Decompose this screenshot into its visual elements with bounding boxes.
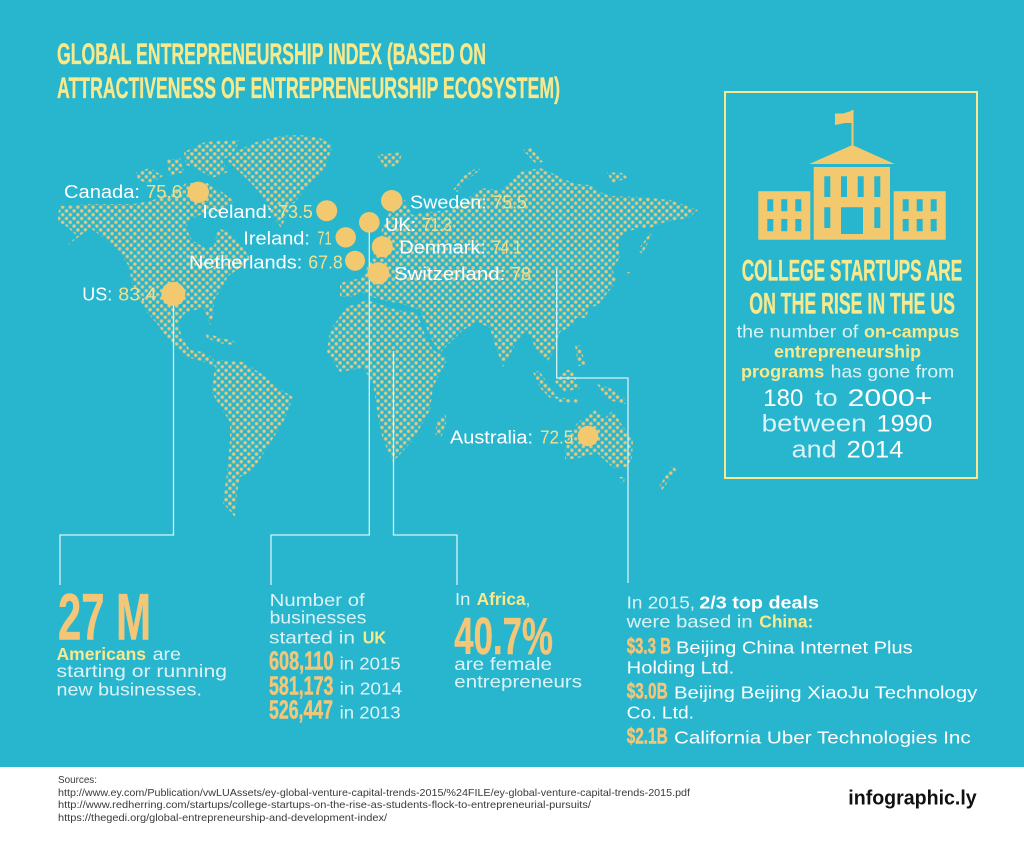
growth figures: 180	[763, 385, 803, 412]
programs text: entrepreneurship	[774, 341, 921, 361]
Arctic islands	[136, 168, 163, 184]
stat: UK businesses: UK	[363, 628, 386, 648]
marker: Iceland: 73.5	[278, 202, 313, 222]
stat: Americans: are	[153, 644, 181, 664]
growth figures	[762, 385, 932, 463]
stat: China deals: Beijing Beijing XiaoJu Technology	[674, 682, 978, 702]
marker: US: US:	[82, 285, 112, 305]
marker: Netherlands	[189, 251, 365, 272]
marker: Australia: 72.5	[540, 427, 573, 447]
stat: China deals: Beijing China Internet Plus	[676, 637, 913, 657]
programs text: has gone from	[831, 361, 954, 381]
stat: China deals: In 2015,	[627, 592, 695, 612]
programs text: the number of	[737, 322, 858, 342]
stat: UK businesses: 608,110	[269, 648, 333, 676]
footer	[0, 767, 1024, 842]
stat: China deals: $3.0B	[627, 678, 668, 703]
Madagascar	[435, 413, 447, 438]
marker: Canada: 75.6	[146, 182, 182, 202]
title	[57, 38, 560, 105]
marker: Canada: Canada:	[64, 182, 140, 202]
Sumatra	[532, 370, 555, 398]
stat: Africa: are female	[454, 654, 552, 674]
programs text: programs	[741, 361, 825, 381]
Kamchatka and Japan	[638, 233, 652, 254]
stat: China deals	[626, 592, 978, 748]
sources: http://www.redherring.com/startups/college-startups-on-the-rise-as-students-flock-to-entrepreneurial-pursuits/	[58, 799, 591, 811]
stat: China deals: Co. Ltd.	[627, 702, 694, 722]
stat: Americans	[56, 580, 227, 699]
South America	[212, 360, 293, 517]
stat: UK businesses: 526,447	[269, 696, 333, 724]
stat: UK businesses: businesses	[270, 608, 367, 628]
Eurasia	[340, 168, 698, 367]
panel: college startups	[725, 92, 977, 478]
stat: UK businesses: in 2013	[340, 702, 401, 722]
marker: US: 83.4	[118, 285, 157, 305]
marker: Iceland	[202, 200, 337, 222]
marker: UK: 71.3	[422, 215, 452, 235]
marker: Australia	[450, 426, 598, 447]
marker: Sweden: 75.5	[493, 192, 527, 212]
map markers and country scores	[64, 182, 598, 447]
Australia	[565, 410, 633, 468]
marker: Switzerland: Switzerland:	[394, 264, 505, 284]
marker: US	[82, 282, 185, 306]
stat: Americans: 27 M	[58, 580, 151, 654]
Philippines	[575, 345, 586, 366]
Borneo	[555, 370, 580, 392]
marker: Switzerland: 78	[511, 264, 531, 284]
logo: infographic.ly	[848, 787, 978, 809]
growth figures: to	[815, 385, 838, 412]
marker: Iceland: Iceland:	[202, 202, 272, 222]
title: GLOBAL ENTREPRENEURSHIP INDEX (BASED ON	[57, 38, 486, 71]
growth figures: between	[762, 411, 867, 438]
stat: Africa: Africa	[477, 589, 526, 609]
programs text	[737, 322, 960, 381]
Java	[552, 396, 582, 403]
stat: Africa: In	[455, 589, 470, 609]
marker: Denmark	[372, 236, 522, 257]
Africa	[327, 300, 448, 462]
marker: Netherlands: 67.8	[308, 252, 343, 272]
stat: China deals: 2/3 top deals	[699, 592, 819, 612]
marker: Australia: Australia:	[450, 427, 533, 447]
marker: Sweden: Sweden:	[410, 192, 487, 212]
growth figures: 2014	[847, 436, 903, 463]
New Guinea	[597, 384, 627, 404]
sources: https://thegedi.org/global-entrepreneurship-and-development-index/	[58, 812, 387, 824]
stat: Africa: entrepreneurs	[454, 672, 582, 692]
stat: UK businesses	[269, 590, 403, 724]
stat: China deals: $3.3 B	[627, 633, 671, 658]
stat: UK businesses: Number of	[270, 590, 365, 610]
growth figures: and	[792, 436, 837, 463]
marker: Ireland	[243, 227, 356, 248]
marker: UK	[359, 212, 452, 235]
marker: Netherlands: Netherlands:	[189, 252, 302, 272]
stat: China deals: China:	[759, 612, 813, 632]
programs text: on-campus	[864, 322, 960, 342]
stat: Africa: 40.7%	[454, 608, 553, 666]
Tasmania and New Zealand	[619, 477, 625, 483]
growth figures: 1990	[877, 411, 932, 438]
marker: Denmark: 74.1	[492, 237, 522, 257]
marker: Canada	[64, 182, 209, 203]
marker: Denmark: Denmark:	[399, 237, 486, 257]
Greenland	[227, 135, 333, 228]
icon: college building	[758, 110, 946, 240]
stat: China deals: California Uber Technologies Inc	[674, 727, 971, 747]
stat: UK businesses: started in	[269, 628, 355, 648]
stat: UK businesses: in 2014	[340, 678, 403, 698]
stat: China deals: Holding Ltd.	[627, 657, 734, 677]
stat: Americans: new businesses.	[56, 679, 202, 699]
marker: Ireland: 71	[317, 228, 332, 248]
stat: China deals: $2.1B	[627, 723, 668, 748]
Cuba	[205, 333, 237, 345]
stat: UK businesses: in 2015	[340, 654, 401, 674]
North America	[58, 183, 250, 368]
stat: Africa	[454, 589, 582, 692]
marker: UK: UK:	[385, 215, 416, 235]
panel heading	[742, 255, 962, 320]
stat: UK businesses: 581,173	[269, 672, 333, 700]
sources: Sources:	[58, 774, 97, 786]
connector lines	[60, 228, 628, 585]
marker: Sweden	[381, 190, 527, 212]
marker: Switzerland	[367, 262, 531, 284]
title: ATTRACTIVENESS OF ENTREPRENEURSHIP ECOSYSTEM)	[57, 72, 560, 105]
sources	[58, 774, 690, 824]
dotted world map	[58, 135, 698, 517]
stat: China deals: were based in	[626, 612, 753, 632]
stat: Americans: Americans	[56, 644, 146, 664]
Arctic Russia	[377, 152, 403, 168]
marker: Ireland: Ireland:	[243, 228, 310, 248]
stat: Africa: ,	[526, 589, 530, 609]
stat: Americans: starting or running	[56, 661, 227, 681]
growth figures: 2000+	[848, 385, 932, 412]
sources: http://www.ey.com/Publication/vwLUAssets/ey-global-venture-capital-trends-2015/%24FILE/ey-global-venture-capital-trends-2015.pdf	[58, 787, 690, 799]
